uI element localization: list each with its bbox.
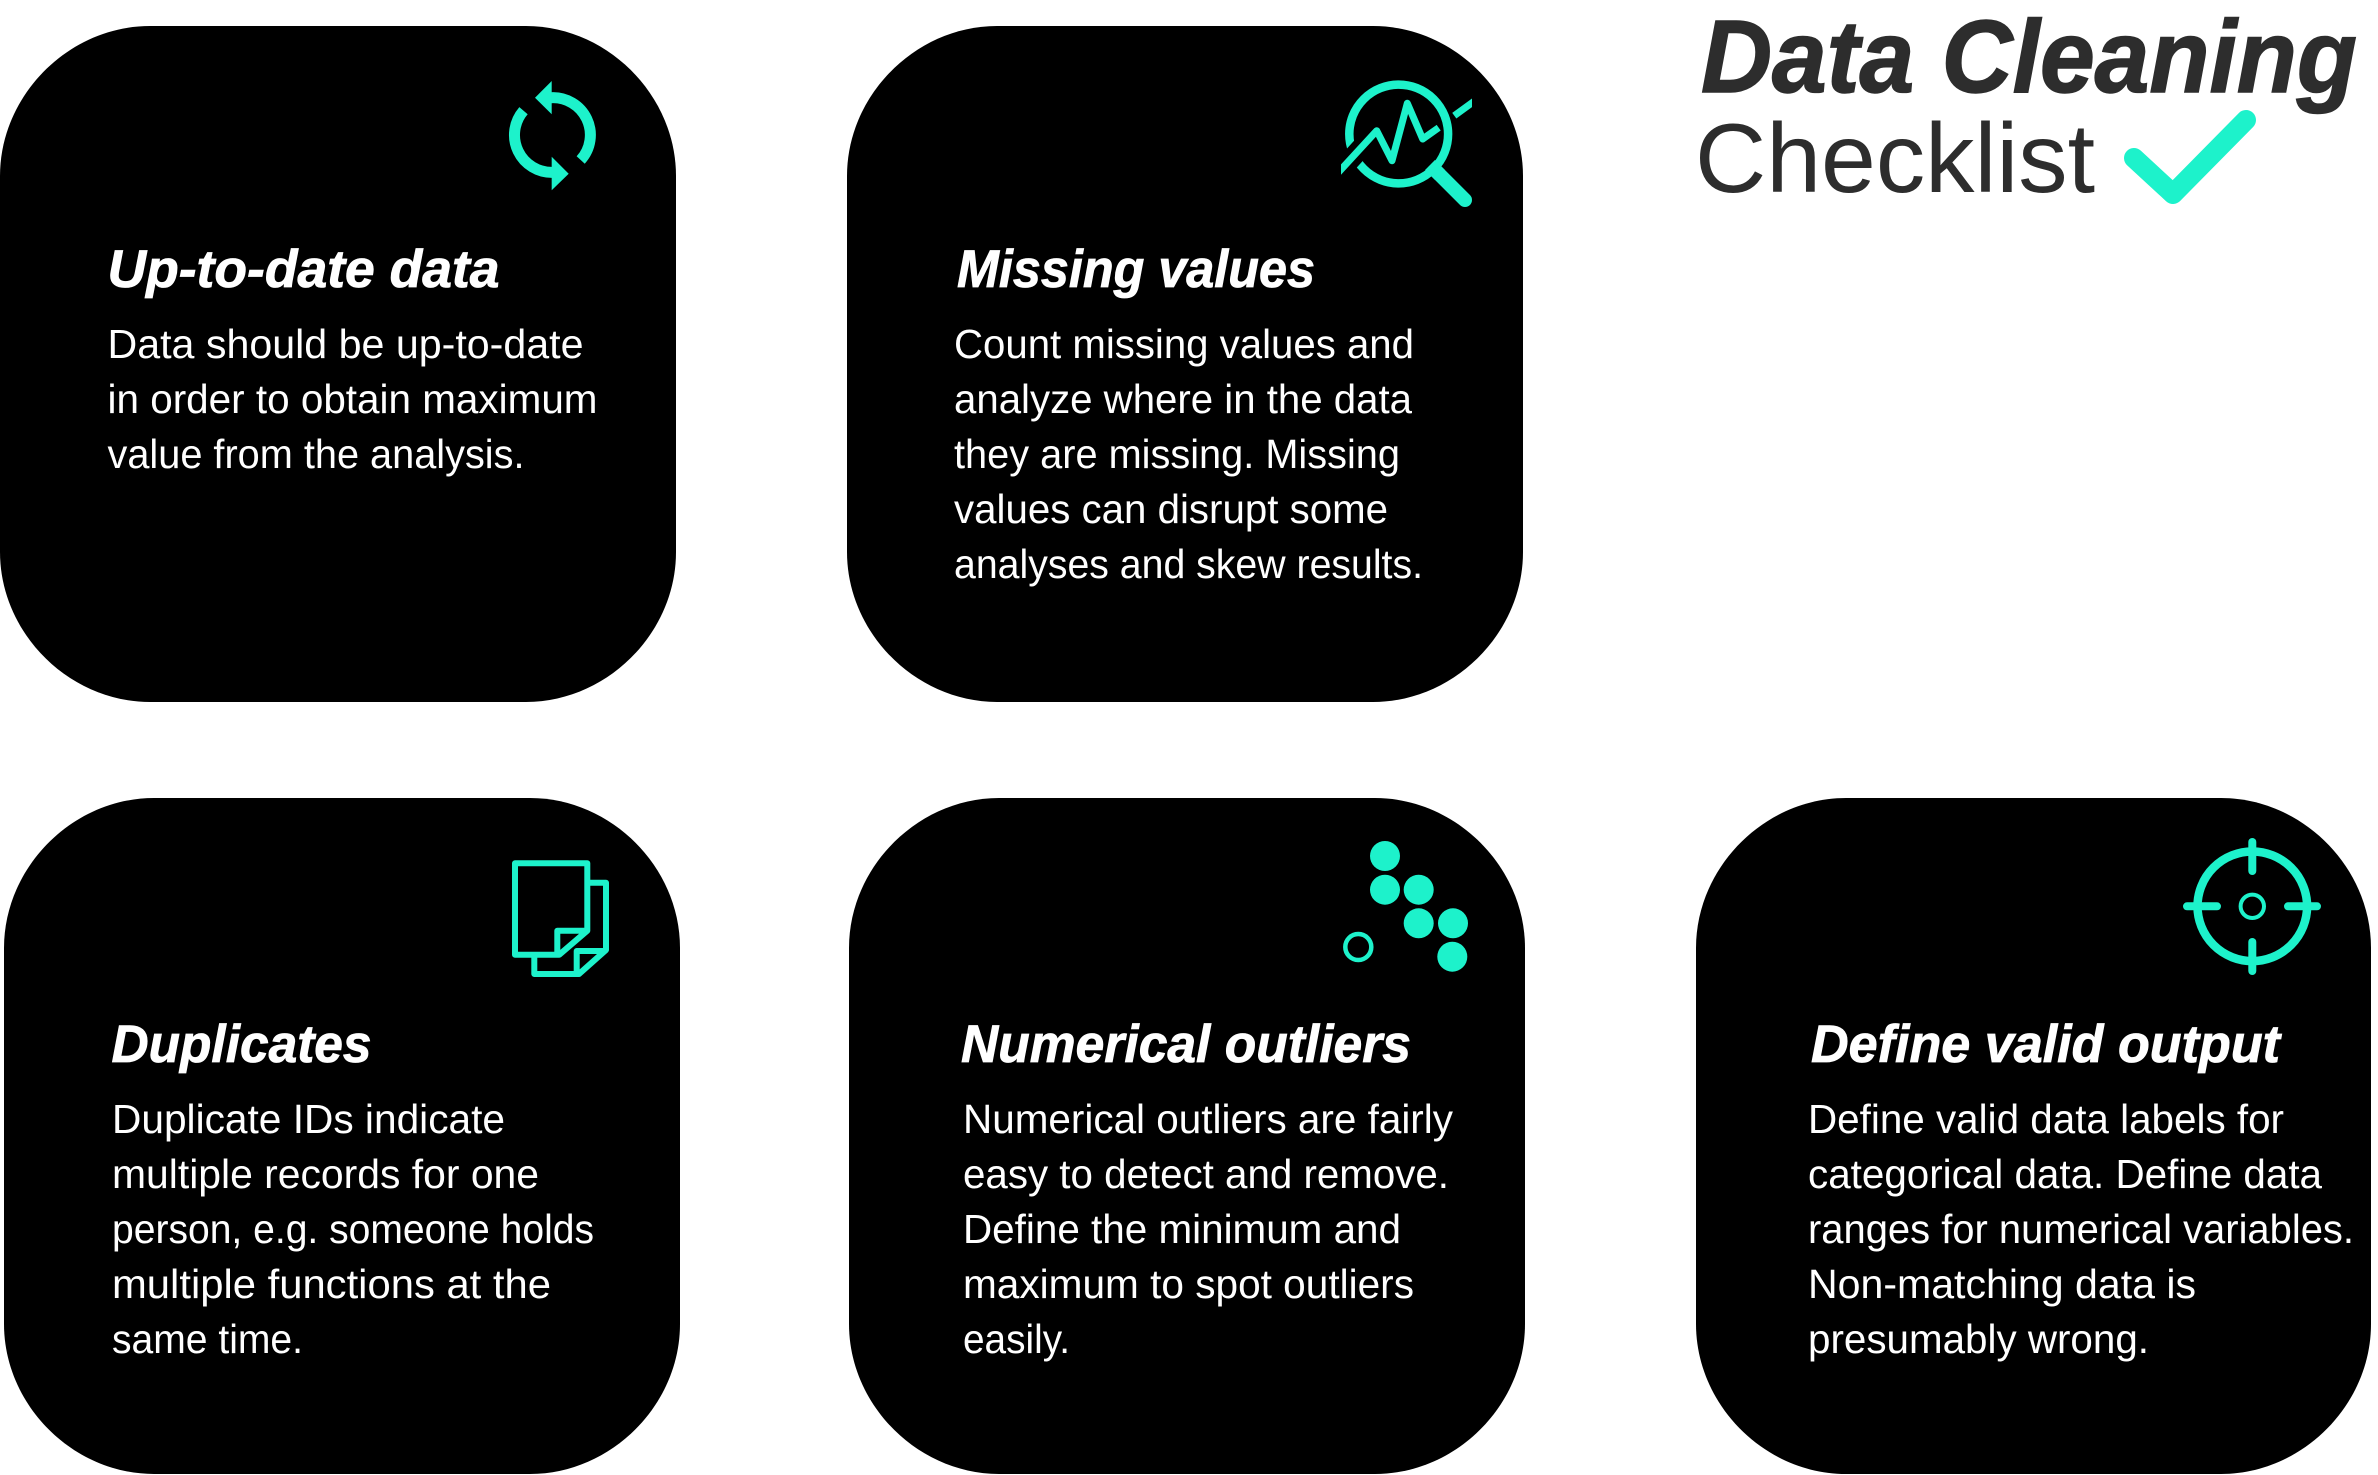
text block: duplicates xyxy=(112,1096,594,1362)
title: Data Cleaning Checklist: Checklist xyxy=(1695,103,2095,213)
icon: sync arrows xyxy=(514,81,590,190)
text block: missing values: Count missing values and xyxy=(954,321,1414,367)
text block: numerical outliers: maximum to spot outliers xyxy=(963,1261,1414,1307)
icon: magnifier with line chart xyxy=(1336,85,1478,200)
text block: duplicates: multiple functions at the xyxy=(112,1261,551,1307)
icon: crosshair target xyxy=(2187,842,2317,971)
text block: numerical outliers: easily. xyxy=(963,1316,1070,1362)
heading: up-to-date data: Up-to-date data xyxy=(108,240,500,299)
heading: numerical outliers: Numerical outliers xyxy=(961,1015,1411,1074)
panel: up-to-date data xyxy=(0,26,676,702)
text block: duplicates: same time. xyxy=(112,1316,303,1362)
text block: define valid output: categorical data. Define data xyxy=(1808,1151,2322,1197)
panel: duplicates xyxy=(4,798,680,1474)
title: Data Cleaning Checklist: Data Cleaning xyxy=(1701,0,2357,114)
text block: define valid output: Define valid data labels for xyxy=(1808,1096,2284,1142)
icon: duplicate documents xyxy=(515,863,606,974)
text block: define valid output xyxy=(1808,1096,2354,1362)
panel: numerical outliers xyxy=(849,798,1525,1474)
heading: define valid output: Define valid output xyxy=(1811,1015,2282,1074)
icon: title check mark xyxy=(2134,120,2246,194)
text block: numerical outliers: easy to detect and remove. xyxy=(963,1151,1449,1197)
text block: missing values: analyze where in the data xyxy=(954,376,1412,422)
title: Data Cleaning Checklist xyxy=(1695,0,2357,213)
panel: define valid output xyxy=(1696,798,2371,1474)
text block: define valid output: Non-matching data is xyxy=(1808,1261,2196,1307)
icon: dot cluster with outlier xyxy=(1345,841,1468,972)
text block: missing values: analyses and skew results. xyxy=(954,541,1423,587)
text block: up-to-date data: value from the analysis. xyxy=(108,431,524,477)
text block: duplicates: person, e.g. someone holds xyxy=(112,1206,594,1252)
text block: missing values xyxy=(954,321,1423,587)
text block: missing values: they are missing. Missing xyxy=(954,431,1400,477)
text block: duplicates: Duplicate IDs indicate xyxy=(112,1096,505,1142)
text block: up-to-date data xyxy=(108,321,598,477)
text block: numerical outliers: Numerical outliers are fairly xyxy=(963,1096,1453,1142)
text block: numerical outliers xyxy=(963,1096,1453,1362)
text block: up-to-date data: in order to obtain maximum xyxy=(108,376,598,422)
heading: duplicates: Duplicates xyxy=(112,1015,372,1074)
text block: define valid output: ranges for numerical variables. xyxy=(1808,1206,2354,1252)
text block: up-to-date data: Data should be up-to-date xyxy=(108,321,584,367)
text block: numerical outliers: Define the minimum and xyxy=(963,1206,1401,1252)
text block: define valid output: presumably wrong. xyxy=(1808,1316,2149,1362)
text block: duplicates: multiple records for one xyxy=(112,1151,539,1197)
panel: missing values xyxy=(847,26,1523,702)
text block: missing values: values can disrupt some xyxy=(954,486,1388,532)
heading: missing values: Missing values xyxy=(957,240,1315,299)
